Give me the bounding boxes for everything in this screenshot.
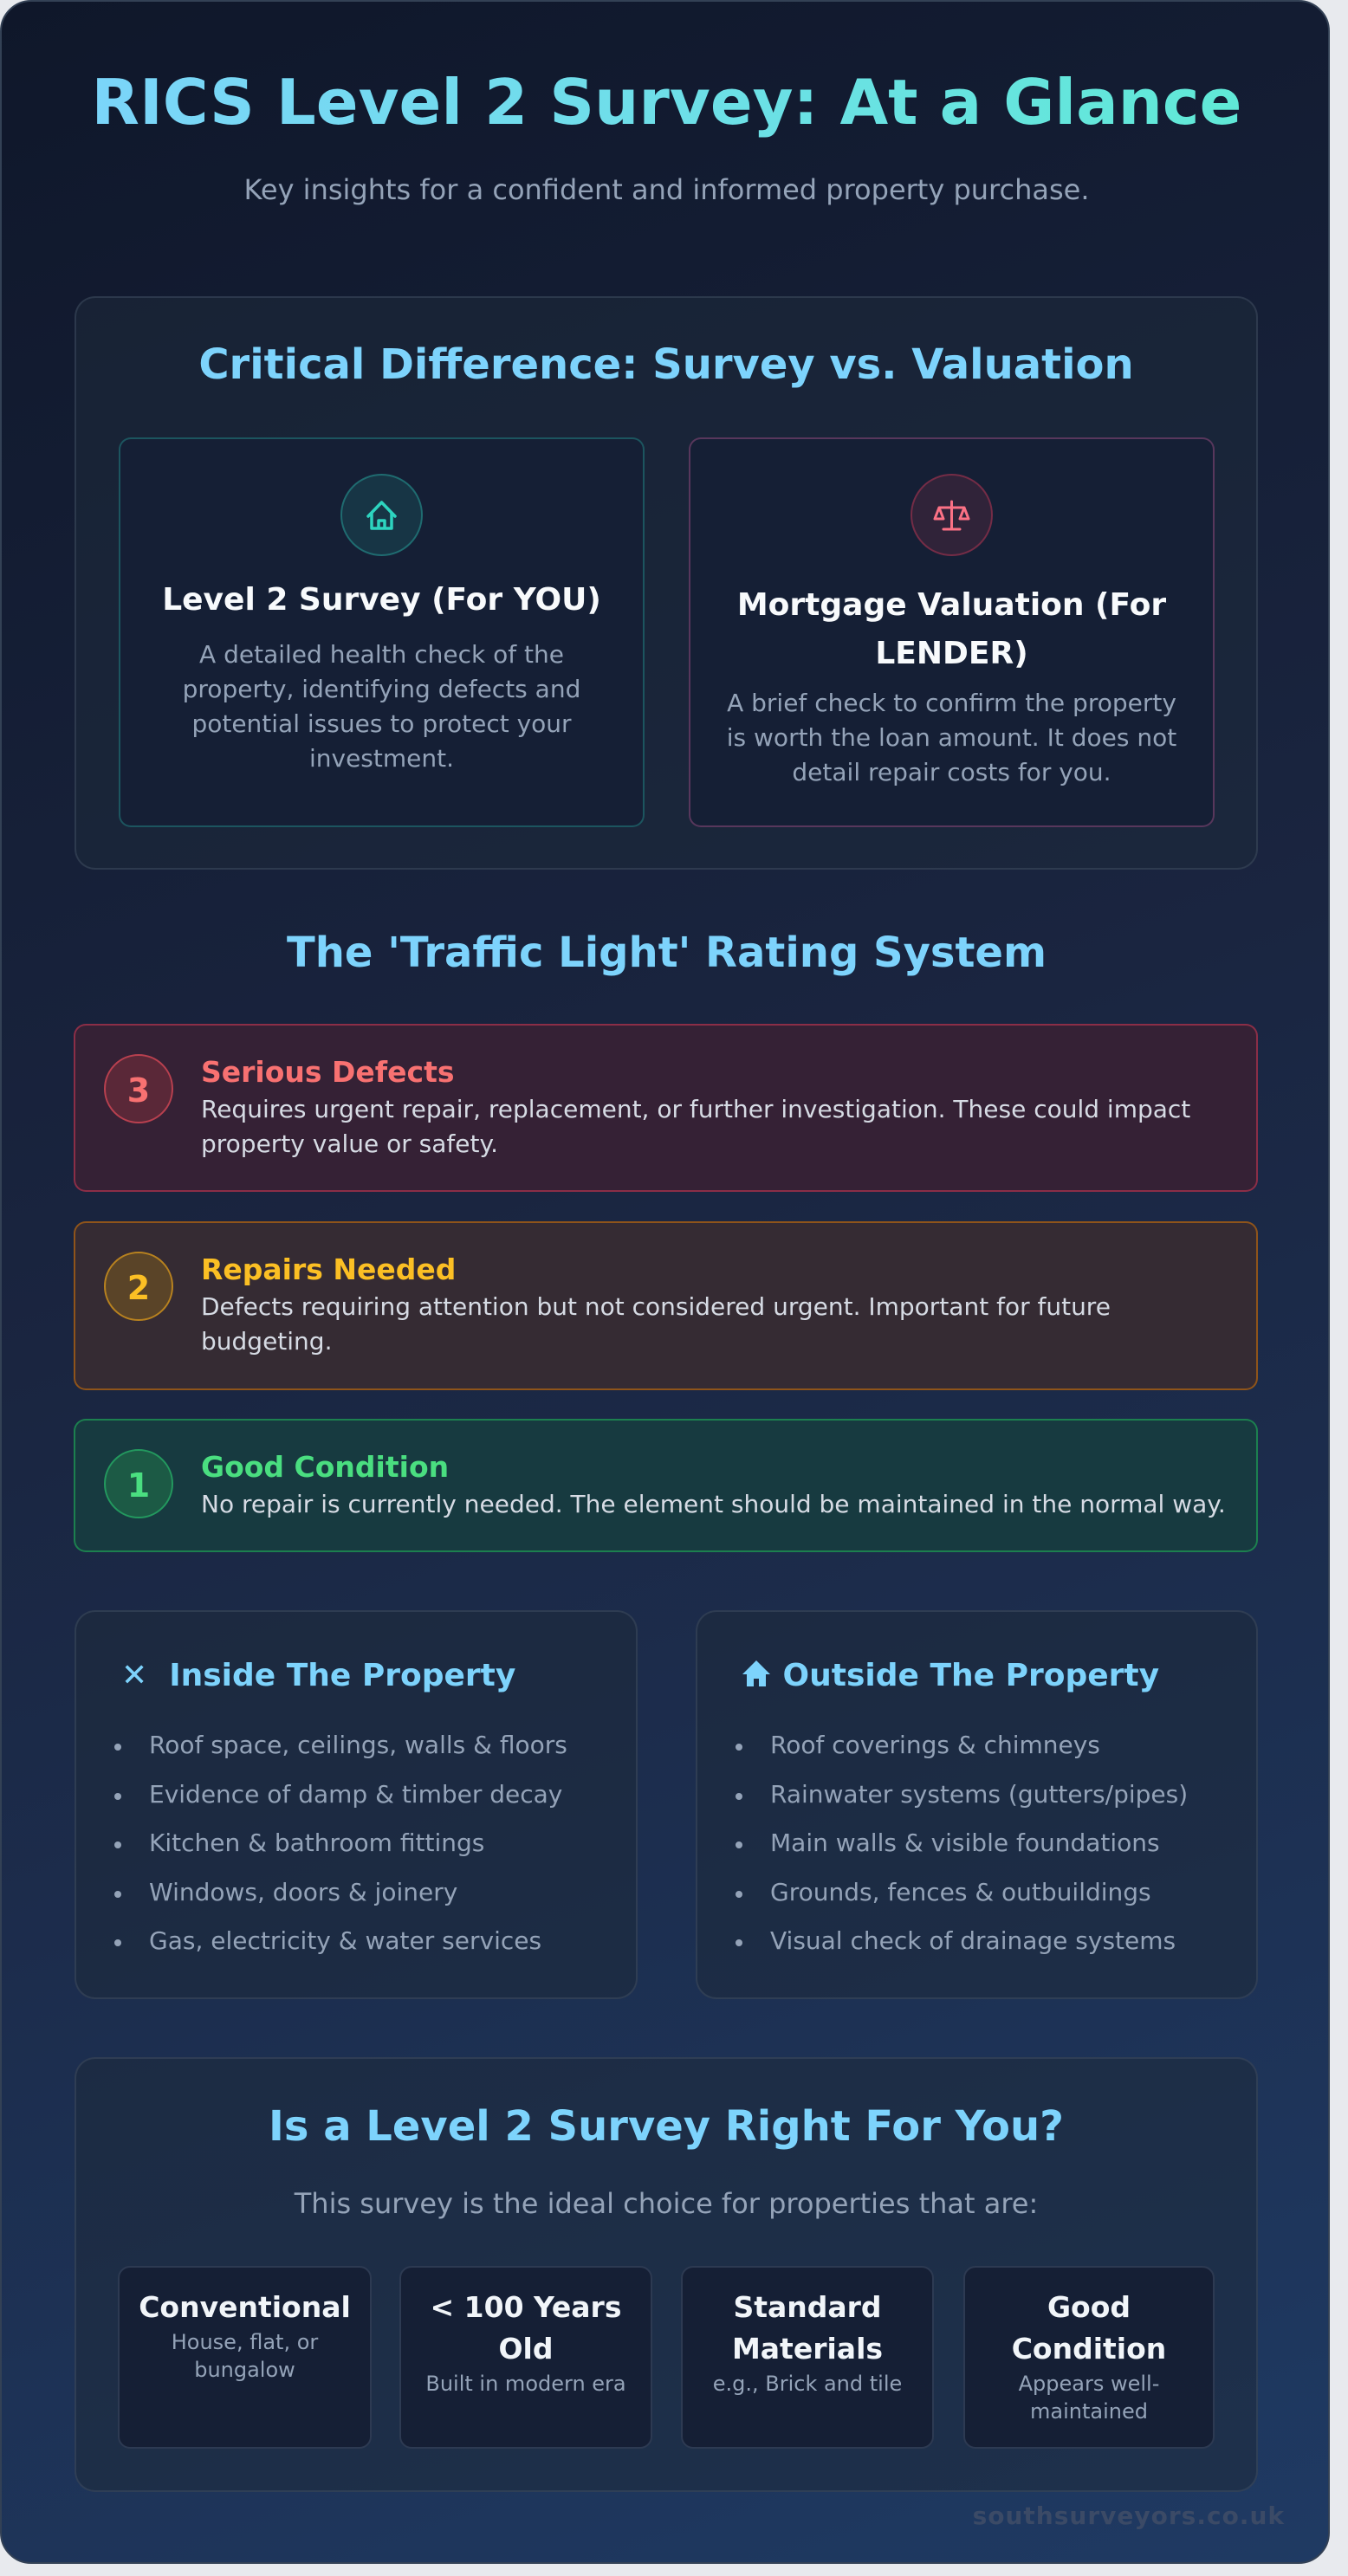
feature: conventional: House, flat, or bungalow — [172, 2330, 318, 2382]
footer: website: southsurveyors.co.uk — [973, 2502, 1285, 2530]
panel: survey vs valuation — [75, 296, 1258, 870]
heading: traffic light: The 'Traffic Light' Rating System — [287, 929, 1047, 977]
card description: A brief check to confirm the property is worth the loan amount. It does not detail repair costs for you. — [727, 689, 1176, 786]
feature: under 100 years: < 100 Years Old — [431, 2290, 621, 2366]
feature: standard materials — [681, 2266, 934, 2449]
badge 3: 3 — [127, 1071, 150, 1110]
feature: standard materials: Standard Materials — [732, 2290, 883, 2366]
title: RICS Level 2 Survey: At a Glance — [92, 66, 1241, 139]
list: outside items: Main walls & visible foundations — [770, 1828, 1160, 1857]
feature: under 100 years — [399, 2266, 652, 2449]
description: Defects requiring attention but not considered urgent. Important for future budgeting. — [201, 1292, 1111, 1356]
heading: critical difference: Critical Difference: Survey vs. Valuation — [198, 340, 1134, 389]
heading: outside: Outside The Property — [783, 1658, 1159, 1693]
badge 1 — [104, 1449, 173, 1518]
list: inside items: Kitchen & bathroom fittings — [149, 1828, 484, 1857]
rating row: good condition — [74, 1419, 1258, 1552]
feature: standard materials: e.g., Brick and tile — [713, 2372, 902, 2396]
feature: good condition: Appears well-maintained — [1019, 2372, 1159, 2424]
card description: A detailed health check of the property, identifying defects and potential issues to protect your investment. — [183, 640, 580, 773]
list: inside items: Evidence of damp & timber decay — [149, 1779, 562, 1809]
badge 2: 2 — [127, 1269, 150, 1307]
feature: conventional — [118, 2266, 372, 2449]
list: inside items: Gas, electricity & water services — [149, 1926, 541, 1955]
feature: conventional: Conventional — [139, 2290, 351, 2324]
list: outside items: Roof coverings & chimneys — [770, 1731, 1100, 1759]
rating row: serious defects — [74, 1024, 1258, 1192]
panel: outside the property — [696, 1610, 1258, 1999]
list: inside items: Roof space, ceilings, walls & floors — [149, 1731, 567, 1759]
sub-card: level 2 survey — [119, 437, 645, 827]
heading: inside: ✕ Inside The Property — [121, 1658, 515, 1693]
panel: is it right for you — [75, 2057, 1258, 2492]
list: outside items: Grounds, fences & outbuildings — [770, 1878, 1151, 1906]
card title: Level 2 Survey (For YOU) — [162, 582, 601, 618]
list: outside items — [736, 1731, 1188, 1955]
title: Good Condition — [201, 1450, 449, 1484]
rating row: repairs needed — [74, 1221, 1258, 1390]
intro text: This survey is the ideal choice for properties that are: — [295, 2187, 1038, 2220]
badge 1: 1 — [127, 1466, 150, 1505]
list: inside items — [114, 1731, 567, 1955]
sub-card: mortgage valuation — [689, 437, 1215, 827]
feature: good condition: Good Condition — [1012, 2290, 1166, 2366]
panel: inside the property — [75, 1610, 638, 1999]
list: inside items: Windows, doors & joinery — [149, 1878, 457, 1906]
icon: scales — [911, 474, 993, 556]
feature: good condition — [963, 2266, 1215, 2449]
title: Repairs Needed — [201, 1252, 456, 1286]
title: Serious Defects — [201, 1055, 455, 1089]
badge 2 — [104, 1252, 173, 1321]
badge 3 — [104, 1054, 173, 1123]
description: Requires urgent repair, replacement, or further investigation. These could impact property value or safety. — [201, 1095, 1190, 1158]
icon: house — [340, 474, 423, 556]
feature: under 100 years: Built in modern era — [425, 2372, 626, 2396]
subtitle: Key insights for a confident and informed property purchase. — [243, 173, 1090, 206]
list: outside items: Visual check of drainage systems — [770, 1926, 1176, 1955]
heading: Is a Level 2 Survey Right For You? — [269, 2102, 1064, 2151]
card title: Mortgage Valuation (For LENDER) — [737, 587, 1166, 671]
list: outside items: Rainwater systems (gutters/pipes) — [770, 1779, 1188, 1809]
description: No repair is currently needed. The element should be maintained in the normal way. — [201, 1490, 1226, 1518]
